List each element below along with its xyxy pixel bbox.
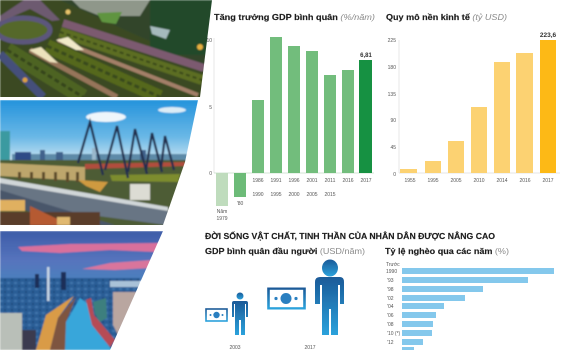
chart: GDP growth bars: 1979 [216,216,228,222]
chart: economy size bars: 180 [388,65,396,71]
icon: large person 2017 [315,260,344,335]
chart: GDP growth bars: 2011 [325,178,336,184]
chart: poverty rate bars: '02 [387,296,394,302]
chart: GDP growth bars: 5 [209,105,212,111]
heading: living standards: ĐỜI SỐNG VẬT CHẤT, TINH THẦN CỦA NHÂN DÂN ĐƯỢC NÂNG CAO [205,230,495,241]
chart: GDP growth bars: 2015 [324,192,336,198]
photo: highway interchange [0,0,215,100]
chart: GDP growth bars: 0 [209,171,212,177]
icon: small person 2003 [232,292,248,335]
chart: economy size bars: 223,6 [540,32,557,39]
chart: GDP growth bars: 2005 [306,192,318,198]
chart: economy size bars: 2005 [450,178,462,184]
icon: small banknote 2003 [206,309,227,321]
chart: economy size bars: 1955 [404,178,416,184]
chart: poverty rate bars: '98 [387,287,394,293]
chart: GDP growth bars: 2016 [342,178,354,184]
chart: GDP growth bars: 2017 [360,178,372,184]
heading: GDP growth: Tăng trưởng GDP bình quân (%/năm) [214,12,375,22]
chart: economy size bars: 2016 [519,178,531,184]
chart: poverty rate bars: '10 (*) [387,331,401,337]
heading: economy size: Quy mô nền kinh tế (tỷ USD) [386,12,507,22]
chart: GDP growth bars [206,37,374,222]
photo: river city at dusk [0,231,170,350]
chart: GDP growth bars: 1995 [270,192,282,198]
chart: poverty rate bars: '04 [387,304,394,310]
photo: cable-stayed bridge [0,100,200,226]
chart: poverty rate bars: '08 [387,322,394,328]
chart: economy size bars: 1995 [427,178,439,184]
heading: GDP per capita: GDP bình quân đầu người (USD/năm) [205,246,365,256]
icon: large banknote 2017 [268,288,304,308]
chart: economy size bars: 2017 [542,178,554,184]
heading: poverty rate: Tỷ lệ nghèo qua các năm (%) [385,246,509,256]
chart: poverty rate bars: '06 [387,313,394,319]
chart: poverty rate bars [386,262,554,350]
chart: economy size bars [388,32,560,184]
chart: economy size bars: 0 [393,172,396,178]
chart: GDP growth bars: Năm [217,209,227,215]
chart: GDP growth bars: '80 [237,201,243,207]
chart: economy size bars: 2014 [496,178,508,184]
chart: GDP growth bars: 1991 [270,178,282,184]
chart: poverty rate bars: '93 [387,278,394,284]
chart: economy size bars: 90 [390,118,396,124]
chart: poverty rate bars: '12 [387,340,394,346]
chart: GDP growth bars: 6,81 [360,53,372,59]
chart: GDP growth bars: 2000 [288,192,300,198]
chart: GDP growth bars: 1986 [252,178,264,184]
chart: GDP growth bars: 2001 [306,178,318,184]
chart: economy size bars: 45 [390,145,396,151]
chart: poverty rate bars: 1990 [386,269,397,275]
chart: GDP growth bars: 1996 [288,178,300,184]
chart: economy size bars: 135 [388,92,396,98]
chart: GDP growth bars: 10 [206,38,212,44]
chart: economy size bars: 225 [388,38,396,44]
chart: economy size bars: 2010 [473,178,485,184]
chart: poverty rate bars: Trước [386,262,400,268]
chart: GDP growth bars: 1990 [252,192,264,198]
